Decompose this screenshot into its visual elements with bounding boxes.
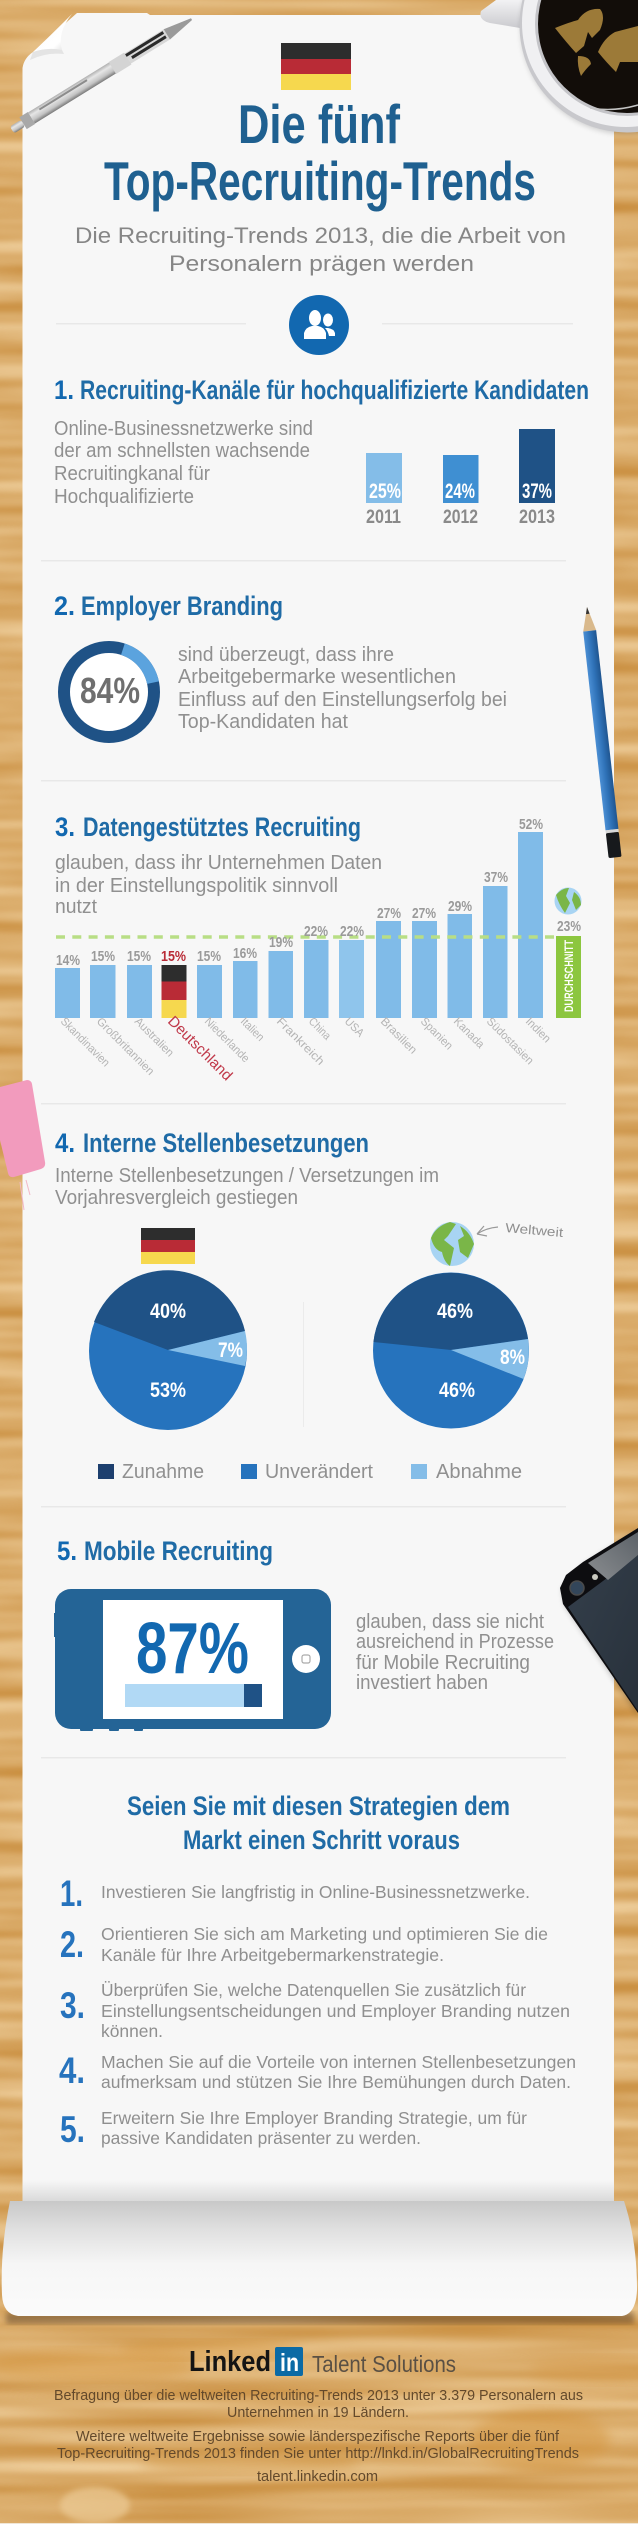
text block 1 [54, 418, 313, 508]
icon: smartphone photo [560, 1528, 638, 1716]
dividers with people icon [56, 295, 573, 355]
value labels: 22% [340, 923, 364, 940]
logo: LinkedIn Talent Solutions: Linked [189, 2346, 271, 2378]
text block 2: Einfluss auf den Einstellungserfolg bei [178, 689, 507, 711]
icon: globe [430, 1222, 474, 1266]
bar chart: 2011-2013 [366, 429, 555, 528]
subtitle [75, 223, 566, 276]
pie chart: Deutschland: 53% [150, 1379, 186, 1402]
country labels: Frankreich [274, 1016, 326, 1068]
legend: Abnahme [436, 1461, 522, 1483]
strategy 1: 1. [60, 1873, 83, 1914]
panel: 1. Recruiting-Kanäle [54, 375, 589, 528]
icon: globe small [554, 888, 582, 914]
strategy 2: Kanäle für Ihre Arbeitgebermarkenstrategie. [101, 1945, 444, 1965]
logo: LinkedIn Talent Solutions: in [280, 2349, 299, 2377]
legend: Zunahme [122, 1461, 204, 1483]
strategy 3: Überprüfen Sie, welche Datenquellen Sie zusätzlich für [101, 1980, 526, 2000]
strategy 5: Erweitern Sie Ihre Employer Branding Strategie, um für [101, 2108, 527, 2128]
value labels: 23% [557, 918, 581, 935]
title [104, 93, 536, 212]
strategy 5: passive Kandidaten präsenter zu werden. [101, 2128, 421, 2148]
text block 2: Top-Kandidaten hat [178, 711, 348, 733]
text block 1: Hochqualifizierte [54, 486, 194, 508]
footer text: Befragung über die weltweiten Recruiting-Trends 2013 unter 3.379 Personalern aus [54, 2387, 583, 2404]
pie chart: Weltweit: 46% [439, 1379, 475, 1402]
text block 4: Interne Stellenbesetzungen / Versetzungen im [55, 1165, 439, 1187]
value labels: 15% [197, 948, 221, 965]
title: Die fünf [238, 93, 401, 155]
donut chart: 84% [64, 647, 154, 737]
subtitle: Personalern prägen werden [169, 251, 474, 276]
strategy 4: aufmerksam und stützen Sie Ihre Bemühungen durch Daten. [101, 2072, 571, 2092]
text block 2 [178, 644, 507, 733]
value labels: 52% [519, 816, 543, 833]
bar chart: 2011-2013: 24% [445, 480, 475, 503]
heading strategies: Markt einen Schritt voraus [183, 1825, 460, 1855]
footer text: Top-Recruiting-Trends 2013 finden Sie unter http://lnkd.in/GlobalRecruitingTrends [57, 2445, 579, 2462]
value labels: 14% [56, 952, 80, 969]
panel: 3. Datengestütztes Recruiting [0, 812, 638, 2485]
text block 1: Online-Businessnetzwerke sind [54, 418, 313, 440]
text block 5: für Mobile Recruiting [356, 1652, 530, 1674]
country labels: Deutschland [164, 1013, 236, 1084]
icon: eraser [0, 1080, 45, 1210]
footer text: talent.linkedin.com [257, 2468, 378, 2485]
bar chart: 2011-2013: 2011 [366, 507, 401, 528]
strategy 4: Machen Sie auf die Vorteile von internen Stellenbesetzungen [101, 2052, 576, 2072]
country labels: Niederlande [202, 1016, 251, 1065]
bar chart: 2011-2013: 25% [369, 480, 401, 503]
country labels: USA [342, 1016, 366, 1040]
pie chart: Weltweit [373, 1272, 529, 1428]
panel: Strategien [59, 1791, 576, 2150]
country labels: Spanien [418, 1016, 455, 1052]
text block 3 [55, 852, 382, 918]
heading 5: 5. [57, 1536, 77, 1566]
strategy 1: Investieren Sie langfristig in Online-Businessnetzwerke. [101, 1882, 530, 1902]
text block 3: in der Einstellungspolitik sinnvoll [55, 875, 338, 897]
text block 5: glauben, dass sie nicht [356, 1611, 544, 1633]
pie chart: Weltweit: 8% [500, 1346, 525, 1369]
value labels: 22% [304, 923, 328, 940]
value labels: 15% [161, 948, 186, 965]
icon: pen [8, 13, 195, 136]
pie chart: Deutschland: 40% [150, 1300, 186, 1323]
country labels: Kanada [451, 1016, 487, 1051]
heading strategies [127, 1791, 510, 1855]
paper roll [2, 2201, 637, 2324]
strategy 3 [60, 1980, 570, 2041]
country labels: Italien [238, 1016, 266, 1044]
subtitle: Die Recruiting-Trends 2013, die die Arbeit von [75, 223, 566, 248]
value labels: 29% [448, 898, 472, 915]
average line [56, 935, 555, 939]
pie chart: Deutschland [89, 1270, 247, 1430]
icon: people [304, 310, 335, 339]
strategy 4: 4. [59, 2050, 85, 2091]
phone graphic: 87% [54, 1589, 331, 1731]
footer text: Weitere weltweite Ergebnisse sowie länderspezifische Reports über die fünf [76, 2428, 560, 2445]
flag: Germany small [141, 1228, 195, 1264]
value labels: 16% [233, 945, 257, 962]
value labels: 15% [127, 948, 151, 965]
text block 4: Vorjahresvergleich gestiegen [55, 1187, 298, 1209]
heading 1: 1. [54, 375, 74, 405]
country labels: China [306, 1016, 333, 1043]
strategy 5 [60, 2108, 527, 2150]
strategy 3: 3. [60, 1985, 85, 2026]
text block 4 [55, 1165, 439, 1209]
text block 5: investiert haben [356, 1672, 488, 1694]
donut chart: 84%: 84% [80, 670, 140, 711]
text block 2: Arbeitgebermarke wesentlichen [178, 666, 456, 688]
country labels: Indien [523, 1016, 553, 1045]
strategy 2 [60, 1924, 548, 1965]
text block 5 [356, 1611, 554, 1694]
panel: 2. Employer Branding [54, 591, 507, 737]
heading 4: 4. [55, 1128, 75, 1158]
logo: LinkedIn Talent Solutions: Talent Solutions [312, 2351, 456, 2377]
strategy 2: Orientieren Sie sich am Marketing und optimieren Sie die [101, 1924, 548, 1944]
heading 3: Datengestütztes Recruiting [83, 812, 361, 842]
logo: LinkedIn Talent Solutions [189, 2346, 456, 2378]
heading 3: 3. [55, 812, 75, 842]
bar chart: 2011-2013: 37% [522, 480, 552, 503]
icon: pencil [581, 606, 622, 858]
bar chart: countries [55, 816, 582, 1084]
country labels: Brasilien [378, 1016, 419, 1057]
strategy 5: 5. [60, 2109, 85, 2150]
average bar [556, 936, 581, 1018]
annotation: Weltweit [477, 1220, 564, 1240]
heading 4: Interne Stellenbesetzungen [83, 1128, 369, 1158]
value labels: 19% [269, 934, 293, 951]
legend: Unverändert [265, 1461, 373, 1483]
value labels [56, 816, 581, 969]
heading strategies: Seien Sie mit diesen Strategien dem [127, 1791, 510, 1821]
country labels [58, 1013, 553, 1084]
panel: footer [54, 2346, 583, 2485]
country labels: Australien [132, 1016, 176, 1059]
text block 1: Recruitingkanal für [54, 463, 210, 485]
panel: 5. Mobile Recruiting [54, 1536, 554, 1731]
text block 5: ausreichend in Prozesse [356, 1631, 554, 1653]
pie chart: Deutschland: 7% [218, 1339, 243, 1362]
text block 2: sind überzeugt, dass ihre [178, 644, 394, 666]
value labels: 27% [412, 905, 436, 922]
pie chart: Weltweit: 46% [437, 1300, 473, 1323]
country labels: Südostasien [484, 1016, 535, 1067]
strategy 2: 2. [60, 1924, 84, 1965]
value labels: 37% [484, 869, 508, 886]
value labels: 15% [91, 948, 115, 965]
strategy 1 [60, 1873, 530, 1914]
icon: coffee cup [480, 0, 638, 134]
text block 3: nutzt [55, 896, 97, 918]
strategy 3: können. [101, 2021, 163, 2041]
text block 3: glauben, dass ihr Unternehmen Daten [55, 852, 382, 874]
annotation: Weltweit: Weltweit [505, 1220, 564, 1240]
bar chart: 2011-2013: 2012 [443, 507, 478, 528]
footer text [54, 2387, 583, 2485]
heading 5: Mobile Recruiting [84, 1536, 273, 1566]
strategy 3: Einstellungsentscheidungen und Employer Branding nutzen [101, 2001, 570, 2021]
strategy 4 [59, 2050, 576, 2092]
bar chart: 2011-2013: 2013 [519, 507, 555, 528]
average bar: DURCHSCHNITT [562, 939, 576, 1012]
country labels: Skandinavien [58, 1016, 112, 1069]
legend [98, 1461, 522, 1483]
phone graphic: 87%: 87% [136, 1609, 249, 1689]
country labels: Großbritannien [94, 1016, 156, 1078]
flag: Germany [281, 43, 351, 90]
heading 2: 2. [54, 591, 75, 621]
bar: Deutschland flag [162, 965, 186, 1018]
panel: 4. Interne Stellenbesetzungen [55, 1128, 564, 1483]
value labels: 27% [377, 905, 401, 922]
heading 2: Employer Branding [81, 591, 283, 621]
footer text: Unternehmen in 19 Ländern. [227, 2404, 409, 2421]
text block 1: der am schnellsten wachsende [54, 440, 310, 462]
